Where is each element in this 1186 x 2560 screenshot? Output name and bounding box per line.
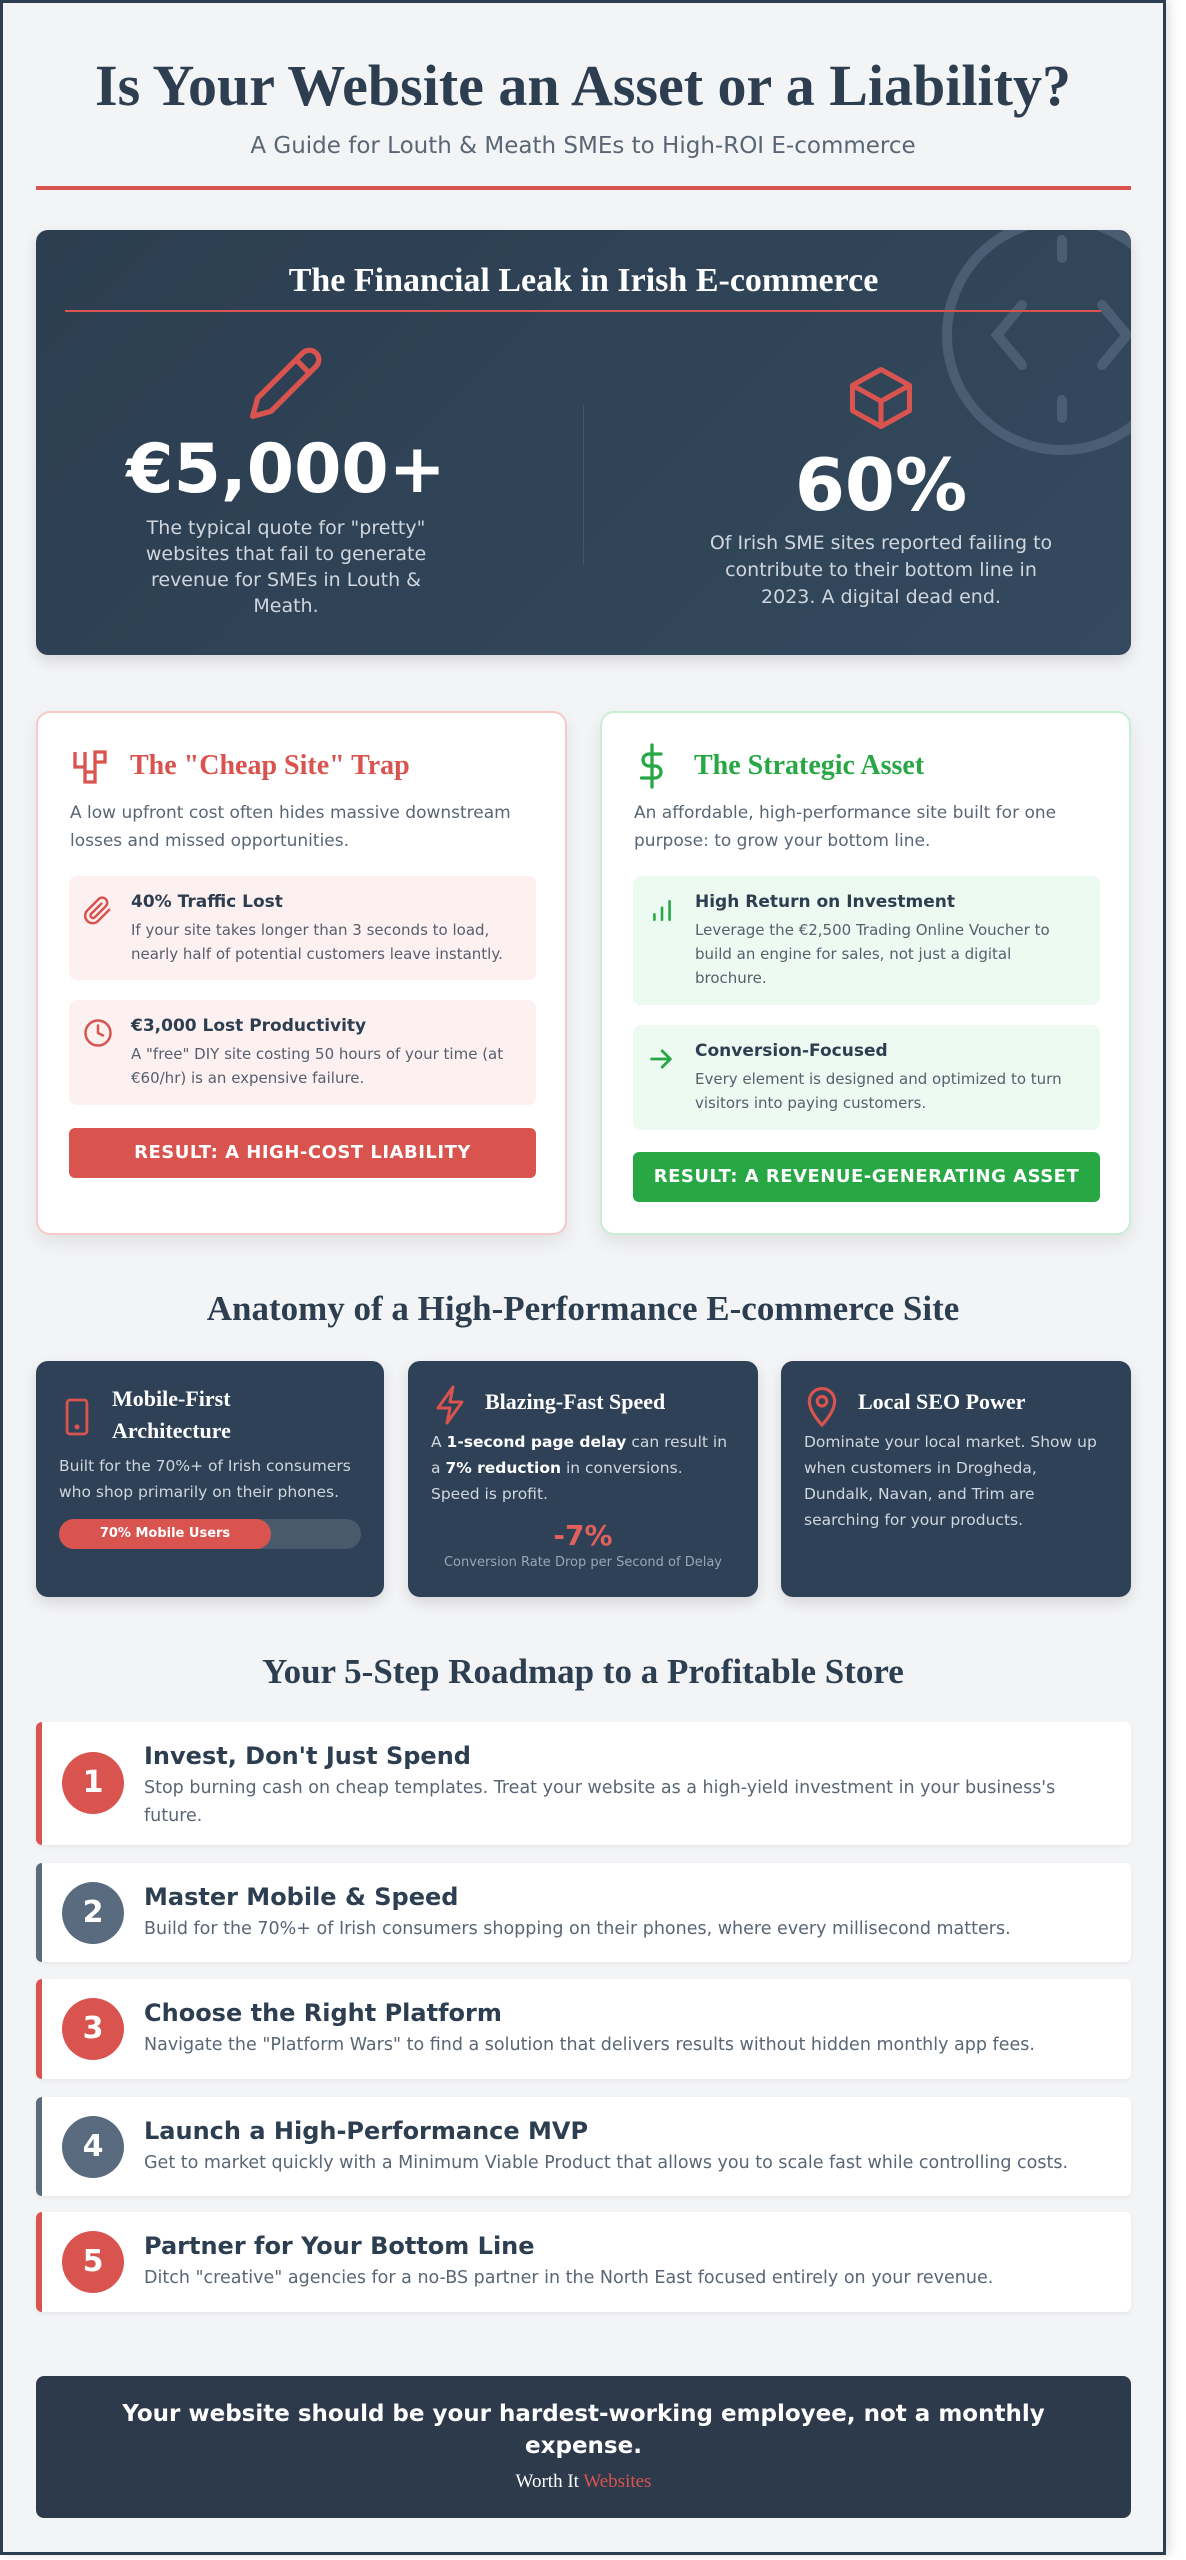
step 2: 2	[83, 1895, 103, 1930]
step 1: Stop burning cash on cheap templates. Treat your website as a high-yield investment in your business's future.	[144, 1778, 1055, 1826]
heading: The Strategic Asset	[694, 750, 924, 781]
result button	[633, 1152, 1100, 1202]
step 1: Invest, Don't Just Spend	[144, 1742, 471, 1770]
step 5: 5	[83, 2244, 103, 2279]
panel: cheap site trap	[36, 711, 567, 1235]
panel: strategic asset	[600, 711, 1131, 1235]
step 2	[36, 1863, 1131, 1962]
item: traffic lost: 40% Traffic Lost	[131, 892, 283, 912]
panel title: The Financial Leak in Irish E-commerce	[289, 262, 878, 299]
decorative icon	[942, 230, 1131, 455]
description: An affordable, high-performance site built for one purpose: to grow your bottom line.	[634, 803, 1056, 851]
result button: RESULT: A HIGH-COST LIABILITY	[134, 1142, 471, 1163]
item: lost productivity	[69, 1000, 536, 1105]
heading: anatomy: Anatomy of a High-Performance E-commerce Site	[207, 1289, 959, 1328]
step 1: 1	[83, 1765, 103, 1800]
card: mobile-first	[36, 1361, 384, 1597]
item: lost productivity: A "free" DIY site costing 50 hours of your time (at €60/hr) is an expensive failure.	[131, 1045, 503, 1087]
card: speed: Blazing-Fast Speed	[485, 1389, 665, 1414]
item: traffic lost: If your site takes longer than 3 seconds to load, nearly half of potential customers leave instantly.	[131, 921, 503, 963]
step 2: Build for the 70%+ of Irish consumers shopping on their phones, where every millisecond matters.	[144, 1919, 1011, 1939]
card: speed	[408, 1361, 758, 1597]
progress bar: 70% Mobile Users	[100, 1526, 230, 1541]
item: ROI	[633, 876, 1100, 1005]
card: mobile-first: Built for the 70%+ of Irish consumers who shop primarily on their phones.	[59, 1457, 351, 1501]
result button	[69, 1128, 536, 1178]
footer: Worth It Websites	[516, 2471, 651, 2492]
step 4: Get to market quickly with a Minimum Viable Product that allows you to scale fast while controlling costs.	[144, 2153, 1068, 2173]
item: traffic lost	[69, 876, 536, 980]
stat: 60%: 60%	[795, 443, 967, 527]
step 3: Choose the Right Platform	[144, 1999, 502, 2027]
card: speed: Conversion Rate Drop per Second of Delay	[444, 1555, 722, 1570]
card: speed: -7%	[553, 1519, 613, 1552]
heading	[640, 743, 924, 789]
subtitle: A Guide for Louth & Meath SMEs to High-ROI E-commerce	[250, 133, 916, 159]
step 5: Ditch "creative" agencies for a no-BS partner in the North East focused entirely on your revenue.	[144, 2268, 993, 2288]
item: conversion: Every element is designed and optimized to turn visitors into paying customers.	[695, 1070, 1062, 1112]
step 4: 4	[83, 2129, 103, 2164]
stat: 5000: €5,000+	[126, 430, 446, 509]
heading: roadmap: Your 5-Step Roadmap to a Profitable Store	[262, 1652, 904, 1691]
item: ROI: High Return on Investment	[695, 892, 955, 912]
card: local seo: Dominate your local market. Show up when customers in Drogheda, Dundalk, Navan, and Trim are searching for your products.	[804, 1433, 1097, 1529]
result button: RESULT: A REVENUE-GENERATING ASSET	[654, 1166, 1079, 1187]
card: local seo	[781, 1361, 1131, 1597]
description: A low upfront cost often hides massive downstream losses and missed opportunities.	[70, 803, 511, 851]
footer	[36, 2376, 1131, 2518]
icon: pencil	[250, 348, 322, 419]
stat: 60%: Of Irish SME sites reported failing to contribute to their bottom line in 2023. A digital dead end.	[710, 532, 1052, 608]
step 3: Navigate the "Platform Wars" to find a solution that delivers results without hidden monthly app fees.	[144, 2035, 1035, 2055]
item: conversion	[633, 1025, 1100, 1130]
heading: The "Cheap Site" Trap	[130, 750, 410, 781]
step 3	[36, 1979, 1131, 2079]
card: speed: A 1-second page delay can result in a 7% reduction in conversions. Speed is profit.	[431, 1433, 727, 1503]
item: conversion: Conversion-Focused	[695, 1041, 888, 1061]
footer: Your website should be your hardest-working employee, not a monthly expense.	[122, 2401, 1045, 2459]
icon: cube	[850, 367, 912, 429]
item: ROI: Leverage the €2,500 Trading Online Voucher to build an engine for sales, not just a digital brochure.	[695, 921, 1050, 987]
title: Is Your Website an Asset or a Liability?	[95, 53, 1071, 118]
stat: 60%	[710, 367, 1052, 608]
step 2: Master Mobile & Speed	[144, 1883, 458, 1911]
progress bar	[59, 1519, 361, 1549]
step 1	[36, 1722, 1131, 1845]
item: lost productivity: €3,000 Lost Productivity	[131, 1016, 366, 1036]
card: local seo: Local SEO Power	[858, 1389, 1025, 1414]
step 5	[36, 2212, 1131, 2312]
step 3: 3	[83, 2011, 103, 2046]
card: mobile-first: Mobile-First Architecture	[112, 1386, 231, 1443]
stat: 5000	[125, 348, 446, 617]
stat: 5000: The typical quote for "pretty" websites that fail to generate revenue for SMEs in Louth & Meath.	[146, 517, 426, 617]
step 5: Partner for Your Bottom Line	[144, 2232, 535, 2260]
panel: financial leak	[36, 230, 1131, 655]
step 4	[36, 2097, 1131, 2196]
step 4: Launch a High-Performance MVP	[144, 2117, 588, 2145]
